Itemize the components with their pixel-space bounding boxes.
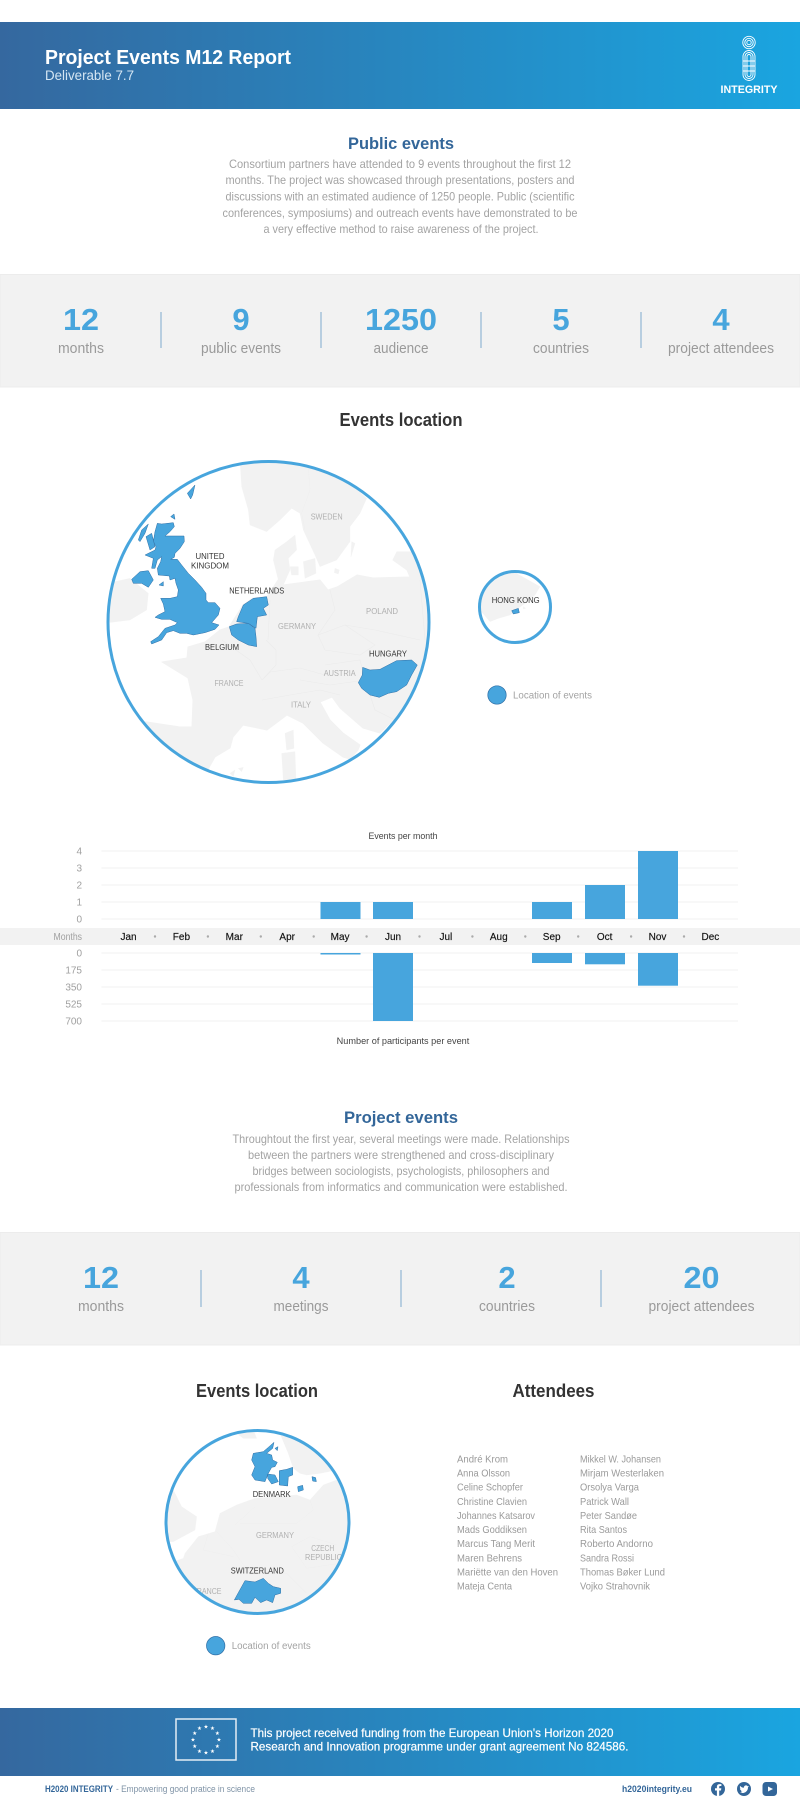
legend: location of events 2: Location of events [232, 1641, 311, 1652]
map: hong kong [480, 572, 550, 642]
map labels: event countries: HUNGARY [369, 649, 407, 659]
stat: countries: 2 [498, 1260, 516, 1295]
stat: months: 12 [83, 1260, 119, 1295]
chart: events per month and participants [0, 831, 800, 1046]
text block: project events description: bridges between sociologists, psychologists, philosophers and [252, 1164, 550, 1178]
text block: project events description [232, 1132, 570, 1194]
map land: ireland [110, 578, 148, 622]
country: shetland islands [187, 485, 195, 499]
y axis: events: 4 [76, 846, 82, 858]
stat: meetings: 4 [292, 1260, 310, 1295]
country: netherlands [237, 597, 268, 628]
text block: project events description: professionals from informatics and communication were established. [234, 1180, 568, 1194]
bars: events per month [320, 851, 678, 919]
text block: public events description [222, 157, 578, 236]
attendees column 2 [580, 1454, 665, 1593]
y axis: events: 3 [76, 864, 82, 874]
panel: project events stats [0, 1232, 800, 1345]
attendees column 1: Christine Clavien [457, 1496, 527, 1508]
heading: events location 2: Events location [196, 1381, 318, 1401]
map labels: FRANCE [192, 1586, 222, 1596]
subtitle: Deliverable 7.7 [45, 67, 134, 83]
title: Project Events M12 Report [45, 47, 291, 69]
stat: audience [365, 302, 437, 357]
y axis: participants [65, 948, 82, 1028]
stat: months [78, 1260, 124, 1315]
y axis: participants: 0 [76, 948, 82, 960]
icon: eu flag: ★ [197, 1749, 202, 1755]
attendees column 2: Thomas Bøker Lund [580, 1566, 665, 1578]
heading: project events: Project events [344, 1108, 458, 1127]
attendees column 2: Vojko Strahovnik [580, 1581, 651, 1593]
list: attendees [457, 1454, 665, 1593]
map labels: GERMANY [256, 1530, 294, 1540]
map labels: grey countries: GERMANY [278, 621, 316, 631]
y axis: participants: 700 [65, 1016, 82, 1028]
y axis: events: 0 [76, 914, 82, 926]
y axis: events [76, 846, 82, 926]
stat: countries [533, 302, 589, 357]
tagline: - Empowering good pratice in science [116, 1784, 255, 1794]
stat: countries: countries [533, 341, 589, 357]
map labels: grey countries: SWEDEN [311, 511, 343, 521]
map labels: grey countries: FRANCE [214, 678, 244, 688]
bars: participants per event [320, 953, 678, 1021]
icon: integrity logo [720, 36, 778, 96]
month axis: Dec [702, 932, 719, 943]
map labels: event countries: UNITED [196, 551, 224, 561]
icon: eu flag: ★ [210, 1726, 215, 1732]
country: hungary [358, 660, 417, 697]
month band [0, 928, 800, 945]
stat: countries: countries [479, 1299, 535, 1315]
map land: northern europe [168, 1432, 348, 1612]
y axis: events: 1 [76, 898, 82, 908]
map land: mediterranean islands [230, 730, 296, 780]
attendees column 1 [457, 1454, 558, 1593]
icon: eu flag: ★ [215, 1744, 220, 1750]
text block: public events description: Consortium partners have attended to 9 events throughout the first 12 [229, 157, 571, 171]
stat: countries [479, 1260, 535, 1315]
footer strip [45, 1782, 777, 1796]
stat: meetings [274, 1260, 328, 1315]
y axis: participants: 525 [65, 1000, 82, 1010]
chart title: participants: Number of participants per event [337, 1036, 470, 1046]
tagline [45, 1784, 255, 1794]
icon: eu flag: ★ [197, 1726, 202, 1732]
stat: project attendees [668, 302, 774, 357]
country: switzerland [234, 1578, 281, 1603]
stat: public events: public events [201, 341, 281, 357]
icon: eu flag: ★ [204, 1750, 209, 1756]
attendees column 2: Orsolya Varga [580, 1482, 639, 1494]
stat: months [58, 302, 104, 357]
attendees column 1: Mariëtte van den Hoven [457, 1566, 558, 1578]
map land: continental europe [145, 552, 428, 769]
y axis: events: 2 [76, 880, 82, 892]
month axis: Jul [440, 932, 452, 943]
heading: public events: Public events [348, 134, 454, 153]
attendees column 2: Patrick Wall [580, 1496, 629, 1508]
map labels: DENMARK [253, 1489, 291, 1499]
attendees column 2: Sandra Rossi [580, 1552, 634, 1564]
stat: audience: audience [374, 341, 428, 357]
text block: public events description: a very effective method to raise awareness of the project. [264, 222, 538, 236]
icon: twitter [737, 1782, 751, 1796]
icon: eu flag [176, 1719, 236, 1760]
month axis: Jan [120, 932, 137, 943]
header banner [0, 22, 800, 109]
map labels: event countries [191, 551, 407, 659]
stat: months: months [78, 1299, 124, 1315]
attendees column 1: André Krom [457, 1454, 508, 1466]
month axis: Mar [226, 932, 244, 943]
website: h2020integrity.eu [622, 1784, 692, 1794]
tagline: H2020 INTEGRITY [45, 1784, 113, 1794]
section: public events intro [222, 134, 578, 236]
map: hong kong: HONG KONG [492, 595, 540, 605]
stat: project attendees: project attendees [668, 341, 774, 357]
icon: eu flag: ★ [191, 1738, 196, 1744]
text block: public events description: months. The project was showcased through presentations, posters and [226, 173, 574, 187]
attendees column 2: Mikkel W. Johansen [580, 1454, 661, 1466]
heading: events location: Events location [340, 410, 462, 430]
map labels [192, 1489, 342, 1596]
attendees column 1: Johannes Katsarov [457, 1510, 536, 1522]
icon: eu flag: ★ [204, 1724, 209, 1730]
icon: eu flag: ★ [215, 1731, 220, 1737]
map: europe events [106, 460, 430, 784]
attendees column 2: Roberto Andorno [580, 1538, 653, 1550]
text block: project events description: between the partners were strengthened and cross-disciplinary [248, 1148, 554, 1162]
country: belgium [229, 623, 257, 647]
attendees column 1: Anna Olsson [457, 1468, 510, 1480]
attendees column 1: Mateja Centa [457, 1581, 512, 1593]
footer funding banner [0, 1708, 800, 1776]
funding statement [250, 1726, 628, 1754]
month axis: Months [54, 932, 82, 943]
map: project meetings [164, 1429, 350, 1615]
icon: eu flag: ★ [210, 1749, 215, 1755]
heading: attendees: Attendees [512, 1381, 594, 1401]
map labels: event countries: NETHERLANDS [229, 586, 284, 596]
map labels: event countries: KINGDOM [191, 560, 229, 570]
map labels: SWITZERLAND [231, 1565, 284, 1575]
month axis: Sep [543, 932, 561, 943]
icon: youtube [762, 1782, 777, 1796]
month axis: Jun [385, 932, 401, 943]
icon: eu flag: ★ [217, 1738, 222, 1744]
map labels: REPUBLIC [305, 1552, 342, 1562]
map labels: grey countries: AUSTRIA [324, 668, 356, 678]
funding statement: This project received funding from the European Union's Horizon 2020 [250, 1726, 614, 1740]
attendees column 1: Marcus Tang Merit [457, 1538, 535, 1550]
stat: public events [201, 302, 281, 357]
stat: project attendees: project attendees [648, 1299, 754, 1315]
icon: integrity logo: INTEGRITY [720, 84, 778, 96]
stat: project attendees [648, 1260, 754, 1315]
attendees column 1: Mads Goddiksen [457, 1524, 527, 1536]
icon: facebook [711, 1782, 725, 1796]
icon: eu flag: ★ [192, 1744, 197, 1750]
legend: location of events: Location of events [513, 690, 592, 702]
month axis: Apr [279, 932, 296, 943]
month axis: Aug [490, 932, 508, 943]
month axis: Oct [597, 932, 613, 943]
map land: scandinavia [240, 460, 367, 585]
stat: public events: 9 [232, 302, 250, 337]
map labels: grey countries [214, 511, 398, 710]
y axis: participants: 350 [65, 982, 82, 994]
legend: location of events [488, 686, 592, 704]
stat: audience: 1250 [365, 302, 437, 337]
month axis: Feb [173, 932, 190, 943]
attendees column 1: Celine Schopfer [457, 1482, 523, 1494]
y axis: participants: 175 [65, 966, 82, 976]
panel: public events stats [0, 274, 800, 387]
map labels: CZECH [311, 1543, 334, 1553]
map labels: grey countries: POLAND [366, 606, 398, 616]
stat: countries: 5 [552, 302, 570, 337]
attendees column 2: Mirjam Westerlaken [580, 1468, 664, 1480]
funding statement: Research and Innovation programme under grant agreement No 824586. [250, 1740, 628, 1754]
stat: project attendees: 20 [684, 1260, 720, 1295]
legend: location of events 2 [206, 1636, 311, 1655]
stat: project attendees: 4 [712, 302, 730, 337]
stat: months: 12 [63, 302, 99, 337]
stat: months: months [58, 341, 104, 357]
attendees column 2: Rita Santos [580, 1524, 627, 1536]
text block: public events description: discussions with an estimated audience of 1250 people. Public (scientific [226, 190, 574, 204]
attendees column 1: Maren Behrens [457, 1552, 522, 1564]
section: project events intro [232, 1108, 570, 1194]
map labels: grey countries: ITALY [291, 700, 311, 710]
text block: public events description: conferences, symposiums) and outreach events have demonstrated to be [222, 206, 578, 220]
month axis [54, 932, 719, 943]
stat: meetings: meetings [274, 1299, 328, 1315]
month axis: May [331, 932, 350, 943]
attendees column 2: Peter Sandøe [580, 1510, 637, 1522]
map labels: event countries: BELGIUM [205, 642, 239, 652]
text block: project events description: Throughtout the first year, several meetings were made. Relationships [232, 1132, 570, 1146]
country: united kingdom [132, 514, 220, 644]
icon: eu flag: ★ [192, 1731, 197, 1737]
chart title: events per month: Events per month [368, 831, 438, 841]
month axis: Nov [649, 932, 666, 943]
country: denmark [252, 1442, 316, 1492]
